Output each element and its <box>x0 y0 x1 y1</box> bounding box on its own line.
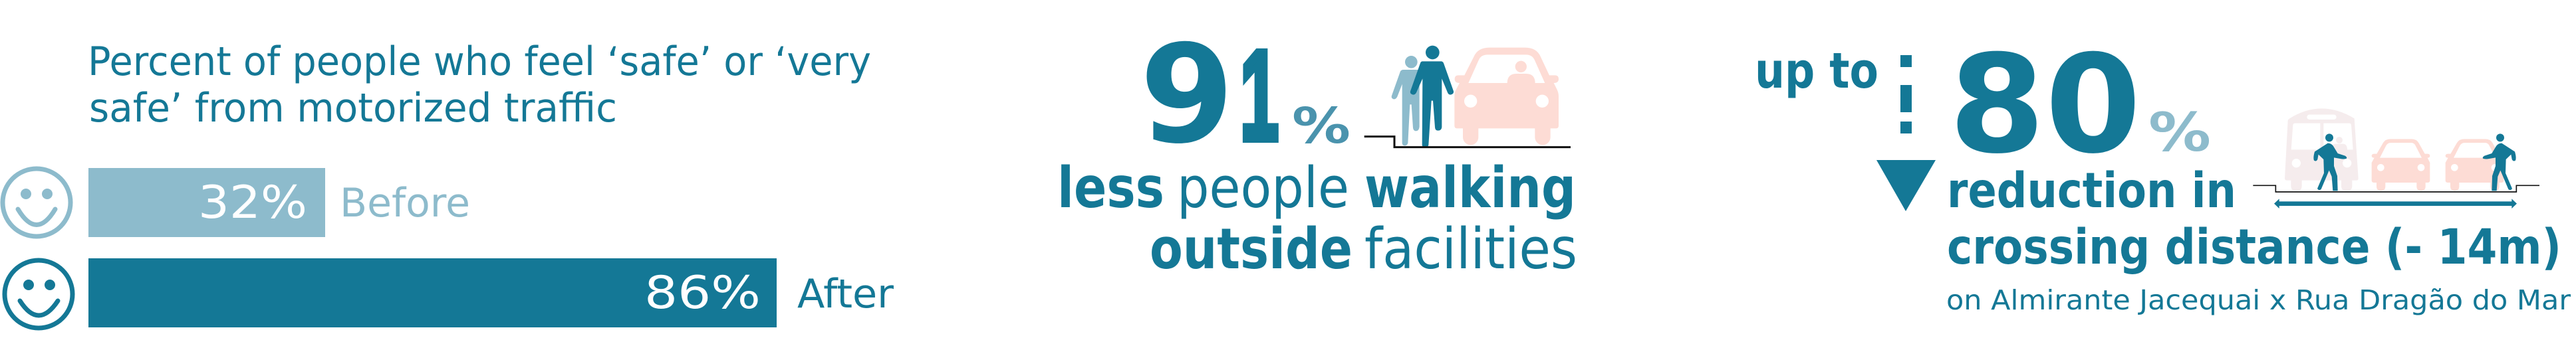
text: up to: up to <box>1755 42 1878 100</box>
icon: smiley before <box>3 169 70 236</box>
bus <box>2285 108 2359 191</box>
bar: after 86%: 86% <box>644 267 761 319</box>
big number 80: 80 <box>1949 27 2141 184</box>
big number 91: 1 <box>1240 24 1279 167</box>
car 1 <box>2372 139 2430 191</box>
pedestrian right <box>2483 133 2516 191</box>
big number 91: 9 <box>1140 17 1234 174</box>
text: less people walking: less <box>1057 155 1164 221</box>
kerb line <box>1364 137 1571 147</box>
text: less people walking: walking <box>1364 155 1576 221</box>
text: outside facilities <box>1150 216 1577 282</box>
bar: before 32% <box>88 168 325 237</box>
arrow: crossing width <box>2274 199 2517 209</box>
heading: safe’ from motorized traffic <box>89 85 617 131</box>
road profile <box>2253 185 2539 192</box>
label: after: After <box>797 271 894 317</box>
label: before: Before <box>340 180 470 226</box>
panel: crossing distance reduction <box>1755 27 2571 316</box>
percent sign: % <box>1292 98 1351 155</box>
text: outside facilities: facilities <box>1364 216 1577 282</box>
bar: before 32%: 32% <box>198 177 307 229</box>
panel: perceived safety from motorized traffic <box>3 39 894 328</box>
text: less people walking: people <box>1177 155 1349 221</box>
percent sign: % <box>2148 102 2211 163</box>
car <box>1454 48 1559 145</box>
heading: Percent of people who feel ‘safe’ or ‘very <box>88 39 871 85</box>
car 2 <box>2446 139 2504 191</box>
icon: pedestrians beside car <box>1364 46 1571 147</box>
pedestrian behind <box>1392 56 1420 145</box>
text: reduction in: reduction in <box>1947 163 2236 219</box>
panel: people walking outside facilities <box>1057 17 1577 282</box>
pedestrian left <box>2313 133 2347 191</box>
text: less people walking <box>1057 155 1576 221</box>
pedestrian in front <box>1410 46 1454 147</box>
text: location note: on Almirante Jacequai x Rua Dragão do Mar <box>1946 284 2571 316</box>
bar: after 86% <box>88 258 777 327</box>
heading <box>88 39 871 131</box>
icon: crossing with bus and cars <box>2253 108 2539 209</box>
text: outside facilities: outside <box>1150 216 1352 282</box>
icon: dashed down arrow <box>1876 55 1936 211</box>
icon: smiley after <box>5 260 72 328</box>
big number 91 <box>1140 17 1279 174</box>
